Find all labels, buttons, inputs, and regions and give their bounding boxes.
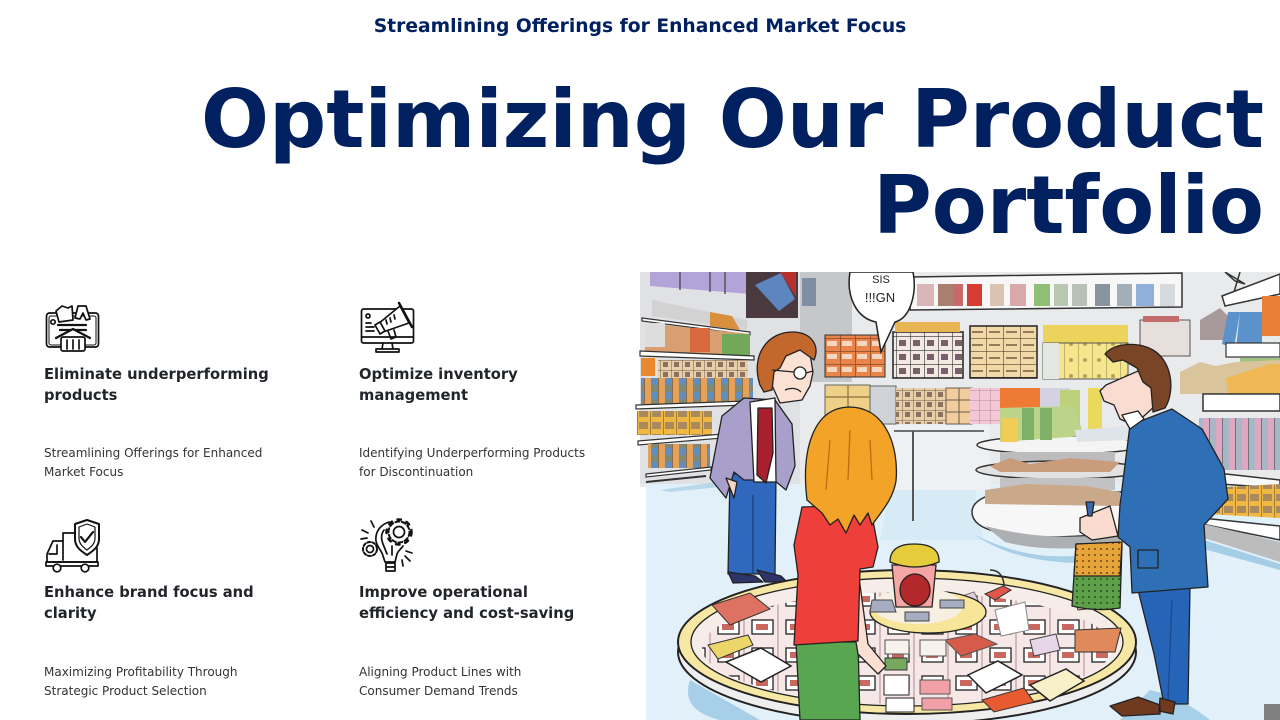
description: Strategic Product Selection <box>44 684 207 698</box>
speech bubble: SIS <box>872 274 890 286</box>
heading: Enhance brand focus and clarity <box>44 584 254 622</box>
icon: monitor with megaphone <box>360 302 414 353</box>
description: Market Focus <box>44 465 123 479</box>
description <box>44 446 262 479</box>
icon: delivery truck with shield <box>45 519 100 573</box>
back wall shelves with products <box>825 273 1190 521</box>
heading: Eliminate underperforming products <box>44 366 269 404</box>
description: Aligning Product Lines with <box>359 665 521 679</box>
man in lavender jacket <box>710 332 816 583</box>
icon: light bulb with gears <box>360 518 413 572</box>
small grey corner square <box>1264 704 1280 720</box>
panel: eliminate underperforming products <box>44 305 269 479</box>
central cup display <box>890 544 939 607</box>
heading: Improve operational efficiency and cost-saving <box>359 584 574 622</box>
tiered round display <box>972 406 1144 563</box>
title: Portfolio <box>873 159 1264 252</box>
description: Consumer Demand Trends <box>359 684 518 698</box>
description: Identifying Underperforming Products <box>359 446 585 460</box>
right wall shelves <box>1180 272 1280 570</box>
description: Streamlining Offerings for Enhanced <box>44 446 262 460</box>
icon: storefront with products <box>46 305 100 352</box>
title: Optimizing Our Product <box>201 73 1264 166</box>
panel: optimize inventory management <box>359 302 585 479</box>
description: Maximizing Profitability Through <box>44 665 238 679</box>
speech bubble <box>849 272 914 352</box>
left wall shelves <box>636 272 816 492</box>
round product table <box>678 570 1136 720</box>
illustration: shoppers in a store aisle <box>635 272 1280 720</box>
store wall background <box>640 272 1280 720</box>
description <box>359 446 585 479</box>
description <box>44 665 238 698</box>
heading: Optimize inventory management <box>359 366 518 404</box>
woman in red blouse <box>794 407 896 720</box>
man in blue suit holding bottle <box>1072 344 1228 716</box>
table floor shadow <box>688 680 1210 720</box>
title <box>201 73 1264 252</box>
speech bubble: !!!GN <box>865 290 895 305</box>
subtitle: Streamlining Offerings for Enhanced Market Focus <box>374 16 906 37</box>
panel: improve operational efficiency <box>359 518 574 698</box>
description <box>359 665 521 698</box>
panel: enhance brand focus and clarity <box>44 519 254 698</box>
description: for Discontinuation <box>359 465 473 479</box>
